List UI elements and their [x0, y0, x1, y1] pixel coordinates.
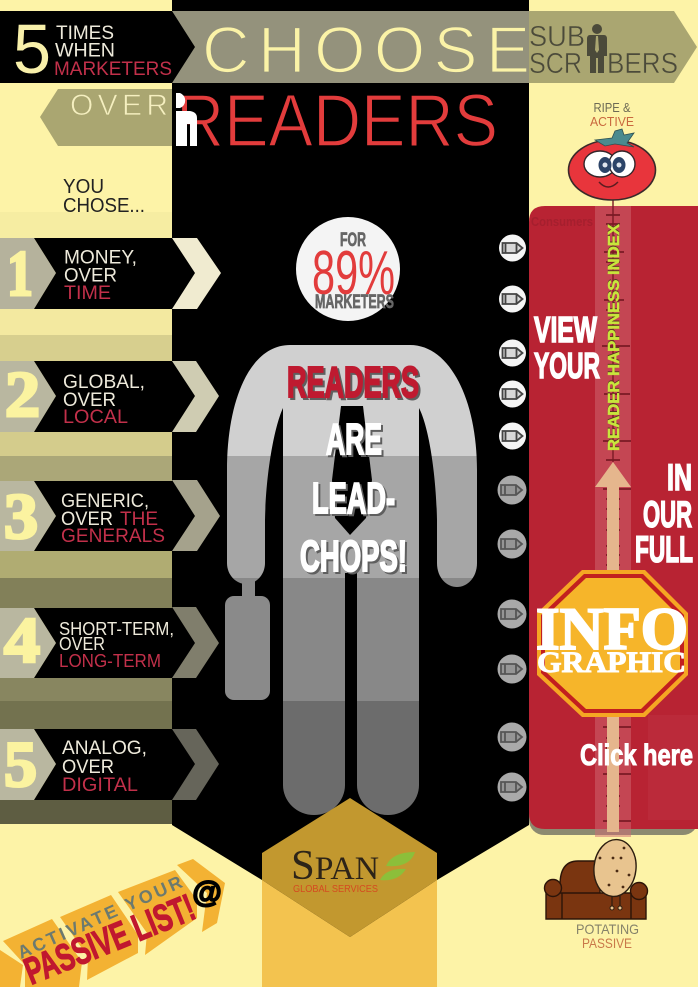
row 2: global over local: GLOBAL,	[63, 371, 145, 393]
stop sign: infographic: GRAPHIC	[537, 646, 686, 679]
text: readers are lead-chops: ARE	[326, 415, 382, 464]
heading banner: 5 times when marketers: 5	[13, 10, 51, 88]
heading banner: 5 times when marketers: WHEN	[55, 40, 115, 62]
logo panel	[262, 798, 437, 987]
text: in our full	[635, 457, 693, 570]
necktie	[332, 406, 372, 535]
row 5: analog over digital: OVER	[62, 756, 114, 778]
row 3: generic over the generals: OVER	[61, 508, 113, 530]
span logo: SPAN	[291, 843, 379, 889]
bullet icons column	[498, 234, 526, 802]
row 4: short-term over long-term	[0, 605, 219, 678]
row 4: short-term over long-term: OVER	[59, 634, 105, 654]
text: you chose: YOU	[63, 176, 104, 198]
icon: potato	[591, 837, 639, 910]
left stripes	[0, 212, 172, 824]
text: view your	[534, 309, 600, 386]
row 5: analog over digital: ANALOG,	[62, 737, 147, 759]
row 4: short-term over long-term: 4	[4, 605, 40, 677]
heading banner: choose: CHOOSE	[202, 12, 530, 86]
heading banner: subscribers: SUB	[529, 21, 585, 53]
red panel: Consumers	[531, 214, 593, 229]
row 1: money over time: OVER	[64, 264, 117, 286]
text: view your: VIEW	[534, 309, 597, 350]
text: view your: YOUR	[534, 345, 600, 386]
sofa and potato: potating passive	[544, 837, 648, 951]
tomato: ripe and active: RIPE &	[594, 100, 631, 115]
row 1: money over time	[0, 238, 221, 310]
icon: dark person	[587, 24, 607, 73]
arrow up	[595, 462, 631, 832]
heading banner: subscribers: BERS	[607, 48, 678, 80]
row 5: analog over digital	[0, 729, 219, 801]
row 1: money over time: 1	[7, 238, 33, 310]
sofa and potato: potating passive: PASSIVE	[582, 935, 632, 951]
tomato: ripe and active: ACTIVE	[590, 114, 634, 129]
row 5: analog over digital: 5	[4, 729, 37, 801]
heading banner: over: OVER	[70, 89, 168, 122]
text: you chose	[63, 176, 145, 217]
row 2: global over local: OVER	[63, 389, 116, 411]
icon: at sign: @	[192, 876, 222, 909]
text: readers are lead-chops: LEAD-	[312, 474, 395, 523]
row 1: money over time: TIME	[64, 282, 111, 304]
text: readers are lead-chops: CHOPS!	[300, 532, 407, 581]
row 3: generic over the generals	[0, 480, 220, 553]
row 2: global over local: 2	[5, 359, 40, 431]
figure: person body	[220, 340, 485, 821]
icon: sofa	[544, 861, 648, 919]
head circle: for 89% marketers: 89%	[312, 239, 395, 308]
ribbon: activate your passive list	[0, 859, 225, 987]
row 4: short-term over long-term: LONG-TERM	[59, 651, 161, 671]
row 3: generic over the generals: GENERALS	[61, 525, 165, 547]
row 2: global over local	[0, 359, 219, 432]
head circle: for 89% marketers	[296, 217, 400, 321]
red panel	[529, 206, 698, 835]
stop sign: infographic	[536, 570, 688, 717]
row 3: generic over the generals: GENERIC,	[61, 490, 149, 512]
heading banner: over	[40, 89, 172, 146]
sofa and potato: potating passive: POTATING	[576, 921, 639, 937]
black central column	[172, 0, 529, 940]
icon: green leaves	[380, 852, 415, 880]
row 2: global over local: LOCAL	[63, 406, 128, 428]
stop sign: infographic: INFO	[536, 596, 688, 662]
row 4: short-term over long-term: SHORT-TERM,	[59, 619, 174, 639]
row 3: generic over the generals: 3	[4, 481, 38, 553]
text: readers are lead-chops	[287, 358, 419, 581]
row 3: generic over the generals: THE	[120, 508, 158, 530]
text: readers are lead-chops: READERS	[287, 358, 419, 407]
head circle: for 89% marketers: FOR	[340, 230, 366, 251]
icon: briefcase	[225, 580, 270, 700]
span logo: GLOBAL SERVICES	[293, 883, 378, 895]
vertical label: READER HAPPINESS INDEX	[606, 223, 623, 451]
text: activate your: ACTIVATE YOUR	[14, 872, 185, 963]
icon: white person	[176, 93, 197, 146]
head circle: for 89% marketers: MARKETERS	[315, 292, 394, 313]
tomato: ripe and active	[568, 100, 656, 200]
heading: readers: READERS	[176, 79, 498, 162]
reader happiness scale	[595, 200, 631, 837]
span logo	[291, 843, 415, 895]
heading banner: 5 times when marketers: MARKETERS	[54, 59, 172, 80]
text: you chose: CHOSE...	[63, 195, 145, 217]
row 5: analog over digital: DIGITAL	[62, 774, 138, 796]
icon: tomato	[568, 129, 656, 200]
heading banner: 5 times when marketers: TIMES	[56, 23, 114, 44]
heading banner: 5 times when marketers	[0, 10, 195, 88]
heading banner: subscribers: SCR	[529, 48, 582, 80]
row 1: money over time: MONEY,	[64, 246, 137, 268]
heading banner: subscribers	[529, 11, 697, 83]
